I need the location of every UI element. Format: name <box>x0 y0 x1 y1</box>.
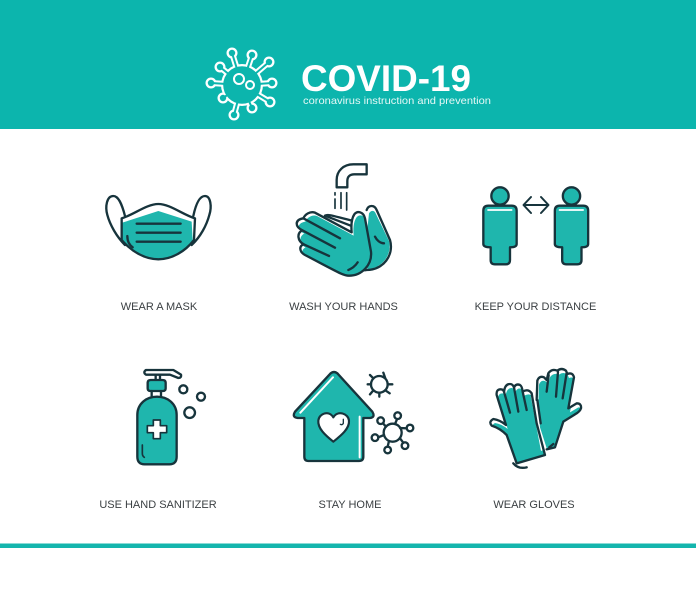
title: COVID-19 <box>301 58 471 99</box>
right glove <box>537 369 581 449</box>
back hand <box>325 206 391 270</box>
person right <box>555 187 588 264</box>
header banner <box>0 0 696 129</box>
icon: virus <box>206 48 278 120</box>
icon: hand sanitizer <box>137 370 205 464</box>
icon: stay home <box>294 372 413 461</box>
front hand <box>297 212 371 276</box>
faucet <box>337 164 367 187</box>
sun <box>371 376 388 393</box>
label: use hand sanitizer: USE HAND SANITIZER <box>99 499 217 511</box>
icon: gloves <box>490 369 583 468</box>
person left <box>483 187 517 264</box>
subtitle: coronavirus instruction and prevention <box>303 95 491 107</box>
label: keep your distance: KEEP YOUR DISTANCE <box>475 301 596 313</box>
footer rule <box>0 544 696 548</box>
label: stay home: STAY HOME <box>319 499 381 511</box>
label: wash your hands: WASH YOUR HANDS <box>289 301 398 313</box>
icon: two people with distance arrow <box>483 187 588 264</box>
icon: washing hands <box>297 164 391 279</box>
label: wear a mask: WEAR A MASK <box>121 301 198 313</box>
arrow: double headed <box>524 197 548 213</box>
water <box>335 193 347 210</box>
label: wear gloves: WEAR GLOVES <box>493 499 575 511</box>
icon: face mask <box>106 196 211 259</box>
virus <box>384 424 402 442</box>
left glove <box>490 384 545 463</box>
heart <box>318 413 349 442</box>
